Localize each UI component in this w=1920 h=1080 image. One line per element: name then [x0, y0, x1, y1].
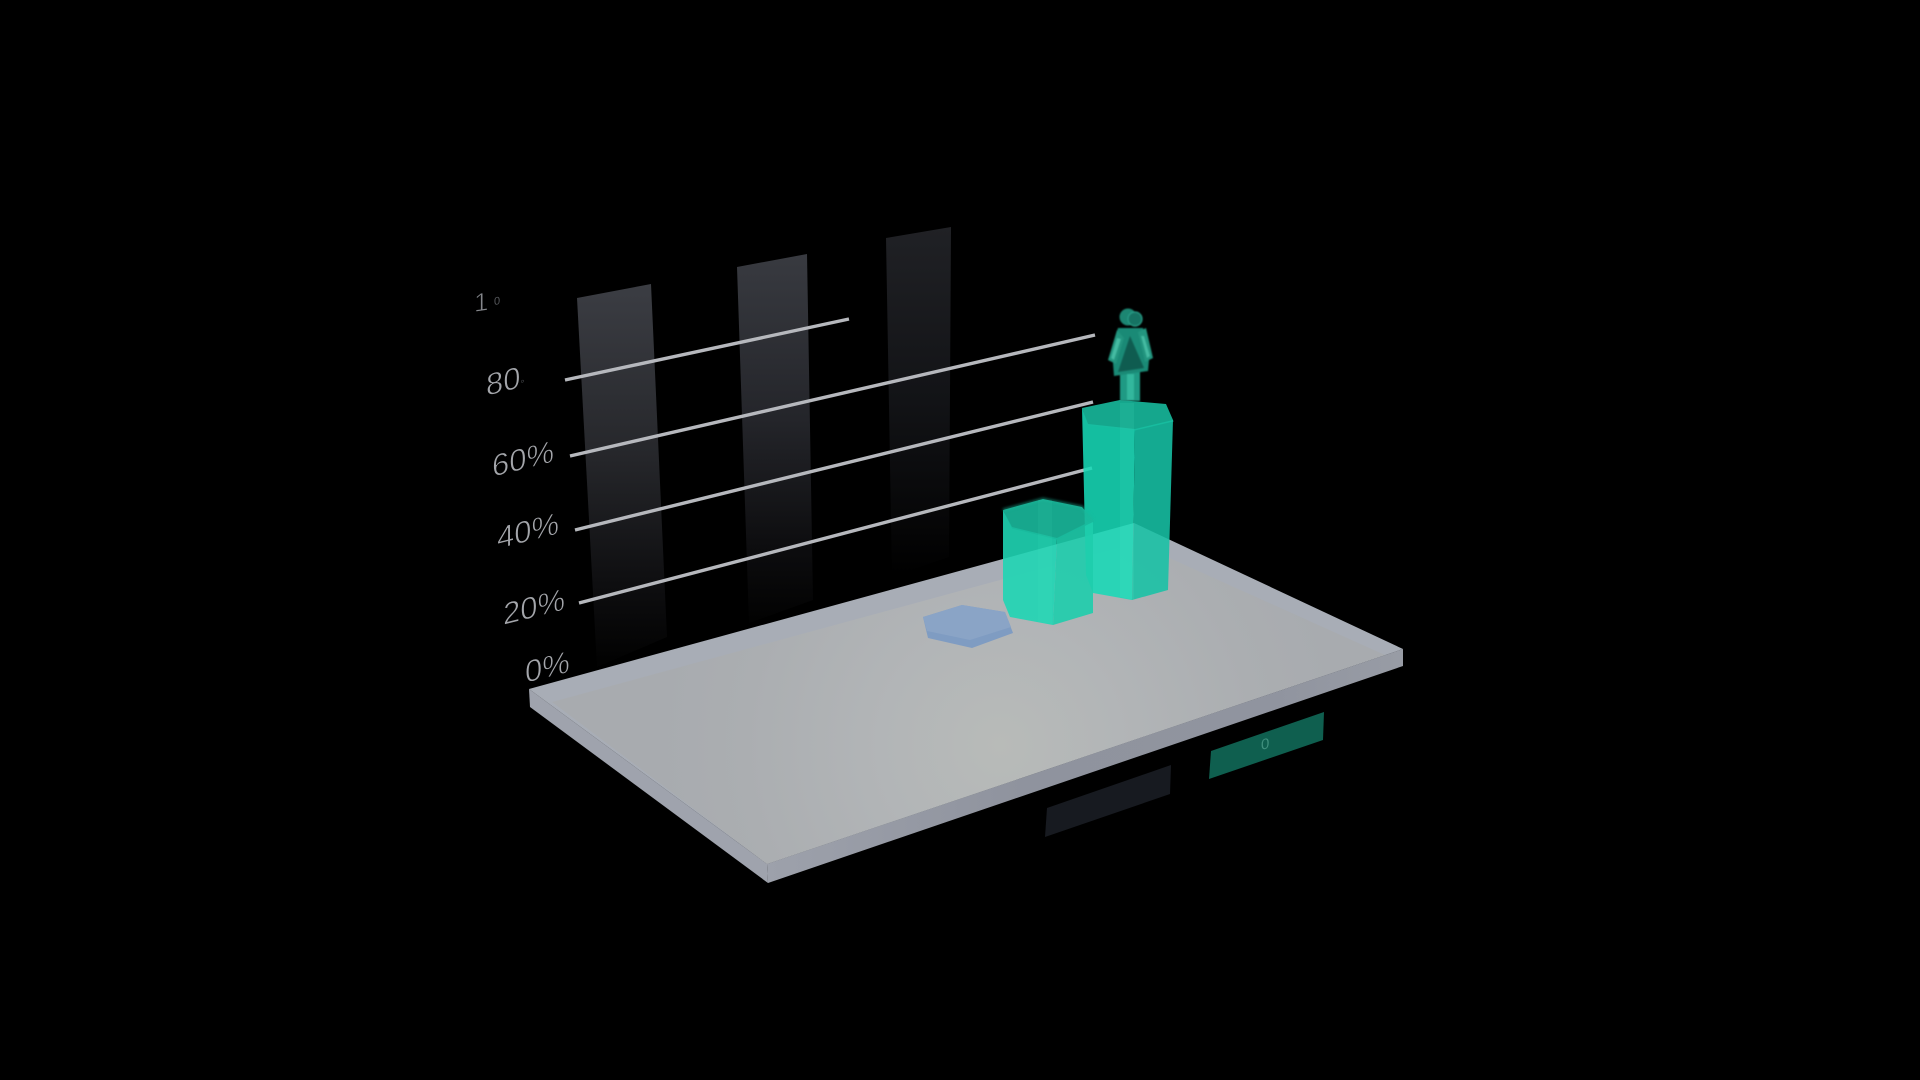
platform right side — [767, 649, 1403, 883]
grid lines — [565, 319, 1095, 603]
y-axis labels — [474, 286, 570, 690]
platform rim — [529, 523, 1403, 864]
platform floor — [552, 543, 1385, 864]
chart contents — [474, 227, 1403, 883]
legend swatch teal — [1209, 712, 1324, 779]
platform — [529, 523, 1403, 883]
label 60%: 60% — [492, 434, 554, 484]
label 100% fading in: 0 — [494, 295, 500, 308]
figure body and skirt — [1112, 328, 1150, 376]
figure legs — [1120, 370, 1140, 401]
legend swatch dark — [1045, 765, 1171, 837]
figure head — [1120, 308, 1142, 326]
label 100% fading in — [474, 286, 500, 318]
blue hexagon: 0% bar — [923, 605, 1013, 648]
column 3 — [886, 227, 951, 577]
column 1 — [577, 284, 667, 667]
label 0%: 0% — [525, 644, 570, 690]
label 80%: 80° — [486, 359, 524, 403]
legend value: 0 — [1261, 735, 1269, 754]
tall teal hexagon bar — [1082, 400, 1174, 600]
icon: woman figure — [1108, 308, 1153, 401]
label 100% fading in: 1 — [474, 286, 488, 318]
figure arms — [1108, 330, 1124, 364]
wall columns — [577, 227, 951, 667]
column 2 — [737, 254, 813, 623]
label 40%: 40% — [497, 506, 559, 556]
platform left side — [529, 689, 768, 883]
short teal hexagon bar — [1003, 499, 1094, 625]
label 20%: 20% — [503, 582, 565, 632]
